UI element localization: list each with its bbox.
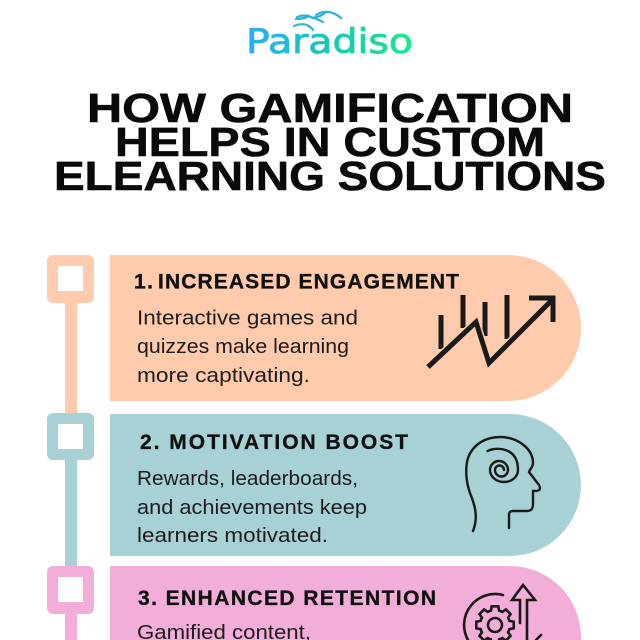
heading 1: 1. <box>134 270 153 294</box>
panel: enhanced retention <box>110 566 581 640</box>
panel: increased engagement <box>110 255 581 401</box>
timeline stem: peach <box>65 300 77 414</box>
icon: birds <box>294 12 341 30</box>
timeline stem: teal <box>65 458 77 568</box>
body text 2 <box>137 467 367 547</box>
timeline marker 3 <box>47 566 94 614</box>
heading 1: INCREASED ENGAGEMENT <box>158 270 459 294</box>
timeline stem: pink <box>65 612 77 640</box>
body text 2: Rewards, leaderboards, <box>137 467 358 490</box>
heading 3: 3. ENHANCED RETENTION <box>138 587 436 610</box>
logo wordmark: Paradiso <box>246 22 413 62</box>
timeline marker 2 <box>47 413 94 460</box>
icon: gear with up arrow <box>464 585 541 640</box>
body text 2: learners motivated. <box>137 524 328 547</box>
icon: rising chart <box>428 295 553 367</box>
title: ELEARNING SOLUTIONS <box>54 153 606 199</box>
panel: motivation boost <box>110 414 581 556</box>
body text 1: Interactive games and <box>137 306 358 330</box>
body text 1: quizzes make learning <box>137 335 349 358</box>
icon: head with spiral <box>466 437 540 531</box>
body text 1: more captivating. <box>137 364 310 387</box>
title: HELPS IN CUSTOM <box>115 119 545 165</box>
body text 1 <box>137 306 358 387</box>
title: HOW GAMIFICATION <box>87 85 573 131</box>
title <box>54 85 606 199</box>
body text 2: and achievements keep <box>137 496 367 519</box>
heading 2: 2. MOTIVATION BOOST <box>140 431 408 454</box>
timeline marker 1 <box>47 255 94 303</box>
logo: Paradiso <box>246 12 413 62</box>
